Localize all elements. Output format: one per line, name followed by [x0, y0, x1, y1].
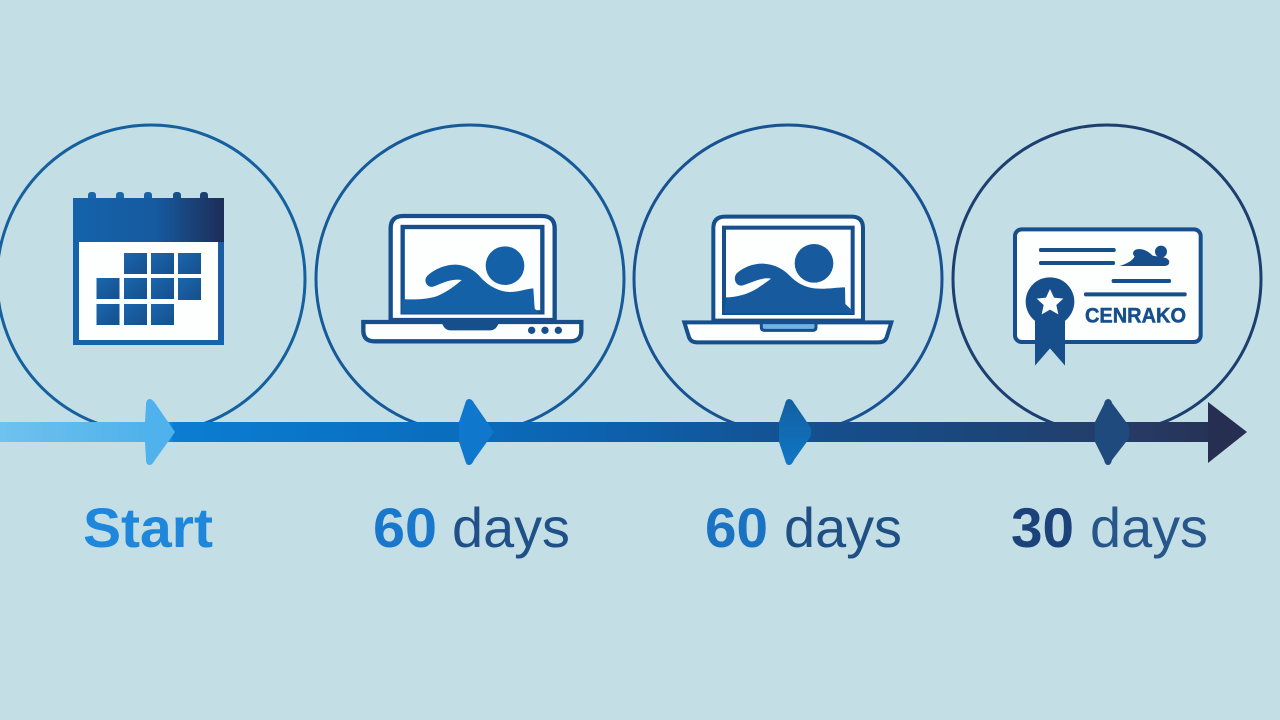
marker: 30 days	[1095, 399, 1129, 465]
panel: start step circle	[0, 125, 305, 433]
icon: laptop with swimmer	[363, 216, 581, 341]
marker: second 60 days	[779, 399, 811, 465]
certificate label: CENRAKO	[1085, 303, 1186, 327]
panel: second 60 days step circle	[634, 125, 942, 433]
label: first 60 days: 60	[373, 496, 437, 559]
label: start: Start	[83, 496, 213, 559]
label: second 60 days	[705, 496, 902, 559]
icon: laptop with swimmer, second	[684, 217, 891, 342]
marker: start	[145, 399, 175, 465]
marker: first 60 days	[459, 399, 494, 465]
panel: 30 days step circle	[953, 125, 1261, 433]
panel: first 60 days step circle	[316, 125, 624, 433]
label: 30 days: 30	[1011, 496, 1074, 559]
label: 30 days	[1011, 496, 1208, 559]
label: first 60 days	[373, 496, 570, 559]
label: first 60 days: days	[452, 496, 570, 559]
label: second 60 days: days	[784, 496, 902, 559]
arrow: end arrowhead	[1208, 402, 1247, 463]
label: second 60 days: 60	[705, 496, 768, 559]
arrow: timeline bar	[0, 402, 1247, 463]
icon: certificate with medal	[1015, 229, 1201, 366]
label: 30 days: days	[1090, 496, 1208, 559]
icon: calendar	[73, 192, 224, 345]
